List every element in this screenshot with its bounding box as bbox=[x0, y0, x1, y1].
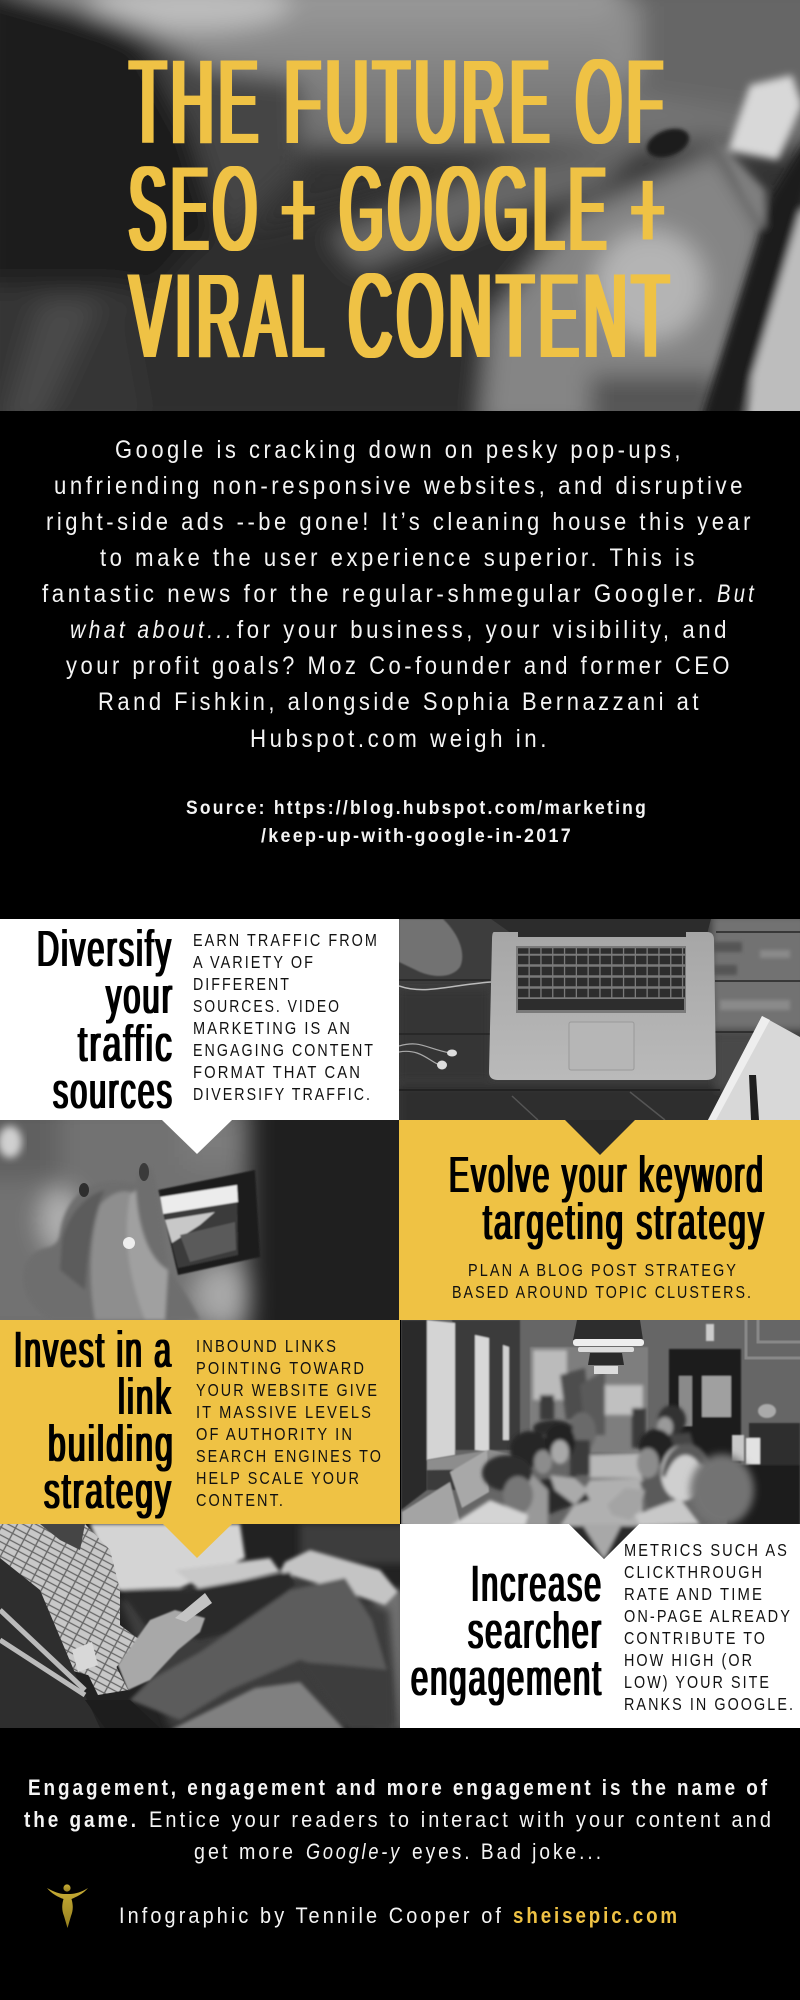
text: diversify body: FORMAT THAT CAN bbox=[193, 1062, 362, 1082]
text: increase body: RATE AND TIME bbox=[624, 1584, 764, 1604]
photo: restaurant table with people bbox=[401, 1320, 800, 1566]
intro paragraph: Rand Fishkin, alongside Sophia Bernazzani at bbox=[98, 688, 702, 716]
intro paragraph: fantastic news for the regular-shmegular Googler. bbox=[42, 580, 707, 608]
photo: hand holding smartphone bbox=[0, 1120, 399, 1320]
panel: increase searcher engagement bbox=[400, 1524, 800, 1728]
heading: invest bbox=[14, 1321, 175, 1519]
text: invest body: SEARCH ENGINES TO bbox=[196, 1446, 383, 1466]
heading: increase bbox=[411, 1555, 603, 1706]
text: diversify body: DIVERSIFY TRAFFIC. bbox=[193, 1084, 372, 1104]
intro paragraph bbox=[42, 436, 757, 753]
closing statement: eyes. Bad joke... bbox=[412, 1839, 604, 1864]
heading: invest: Invest in a bbox=[14, 1321, 173, 1378]
heading: diversify bbox=[37, 920, 174, 1119]
hero photo: finger touching tablet bbox=[0, 0, 800, 430]
heading: diversify: your bbox=[106, 967, 174, 1024]
credit line: Infographic by Tennile Cooper of bbox=[119, 1903, 504, 1928]
text: increase body: HOW HIGH (OR bbox=[624, 1650, 754, 1670]
text: invest body bbox=[196, 1336, 383, 1510]
heading: invest: strategy bbox=[44, 1462, 173, 1519]
source line bbox=[186, 797, 648, 847]
closing statement bbox=[24, 1775, 774, 1864]
text: invest body: HELP SCALE YOUR bbox=[196, 1468, 361, 1488]
heading: increase: Increase bbox=[471, 1555, 603, 1612]
text: diversify body bbox=[193, 930, 379, 1104]
intro paragraph: for your business, your visibility, and bbox=[237, 616, 730, 644]
text: invest body: IT MASSIVE LEVELS bbox=[196, 1402, 373, 1422]
text: increase body: CONTRIBUTE TO bbox=[624, 1628, 767, 1648]
heading: invest: building bbox=[48, 1415, 175, 1472]
heading: evolve bbox=[449, 1146, 766, 1250]
text: increase body: LOW) YOUR SITE bbox=[624, 1672, 771, 1692]
closing statement: get more bbox=[194, 1839, 296, 1864]
text: invest body: INBOUND LINKS bbox=[196, 1336, 338, 1356]
source line: Source: https://blog.hubspot.com/marketing bbox=[186, 797, 648, 819]
text: diversify body: MARKETING IS AN bbox=[193, 1018, 352, 1038]
heading: diversify: traffic bbox=[78, 1015, 174, 1072]
panel: invest in a link building strategy bbox=[0, 1320, 400, 1525]
text: diversify body: DIFFERENT bbox=[193, 974, 291, 994]
closing statement: the game. bbox=[24, 1807, 139, 1832]
credit line: sheisepic.com bbox=[513, 1903, 680, 1928]
text: invest body: CONTENT. bbox=[196, 1490, 285, 1510]
photo: laptop on wooden desk bbox=[399, 915, 800, 1160]
heading: diversify: Diversify bbox=[37, 920, 173, 977]
heading: increase: searcher bbox=[468, 1602, 603, 1659]
panel: evolve your keyword targeting strategy bbox=[399, 1120, 800, 1320]
intro paragraph: But bbox=[717, 580, 757, 608]
text: diversify body: SOURCES. VIDEO bbox=[193, 996, 341, 1016]
text: invest body: POINTING TOWARD bbox=[196, 1358, 366, 1378]
intro paragraph: Hubspot.com weigh in. bbox=[250, 725, 550, 753]
callout notch: yellow pointer bbox=[163, 1524, 232, 1558]
callout notch: white pointer bbox=[162, 1120, 232, 1154]
intro paragraph: Google is cracking down on pesky pop-ups, bbox=[115, 436, 684, 464]
source line: /keep-up-with-google-in-2017 bbox=[261, 825, 573, 847]
text: diversify body: ENGAGING CONTENT bbox=[193, 1040, 375, 1060]
intro paragraph: what about... bbox=[70, 616, 235, 644]
text: invest body: OF AUTHORITY IN bbox=[196, 1424, 354, 1444]
heading: invest: link bbox=[118, 1368, 173, 1425]
text: evolve body: PLAN A BLOG POST STRATEGY bbox=[468, 1260, 738, 1280]
text: diversify body: EARN TRAFFIC FROM bbox=[193, 930, 379, 950]
heading: increase: engagement bbox=[411, 1649, 603, 1706]
text: evolve body bbox=[452, 1260, 753, 1302]
closing statement: Google-y bbox=[306, 1839, 402, 1864]
title bbox=[129, 35, 674, 383]
photo: person on phone with jeans and plaid shirt bbox=[0, 1524, 410, 1730]
text: increase body: CLICKTHROUGH bbox=[624, 1562, 764, 1582]
icon: golden figure logo bbox=[47, 1884, 88, 1928]
panel: diversify your traffic sources bbox=[0, 919, 399, 1120]
heading: diversify: sources bbox=[53, 1062, 174, 1119]
text: invest body: YOUR WEBSITE GIVE bbox=[196, 1380, 379, 1400]
intro paragraph: to make the user experience superior. This is bbox=[100, 544, 698, 572]
text: increase body bbox=[624, 1540, 795, 1714]
text: diversify body: A VARIETY OF bbox=[193, 952, 315, 972]
